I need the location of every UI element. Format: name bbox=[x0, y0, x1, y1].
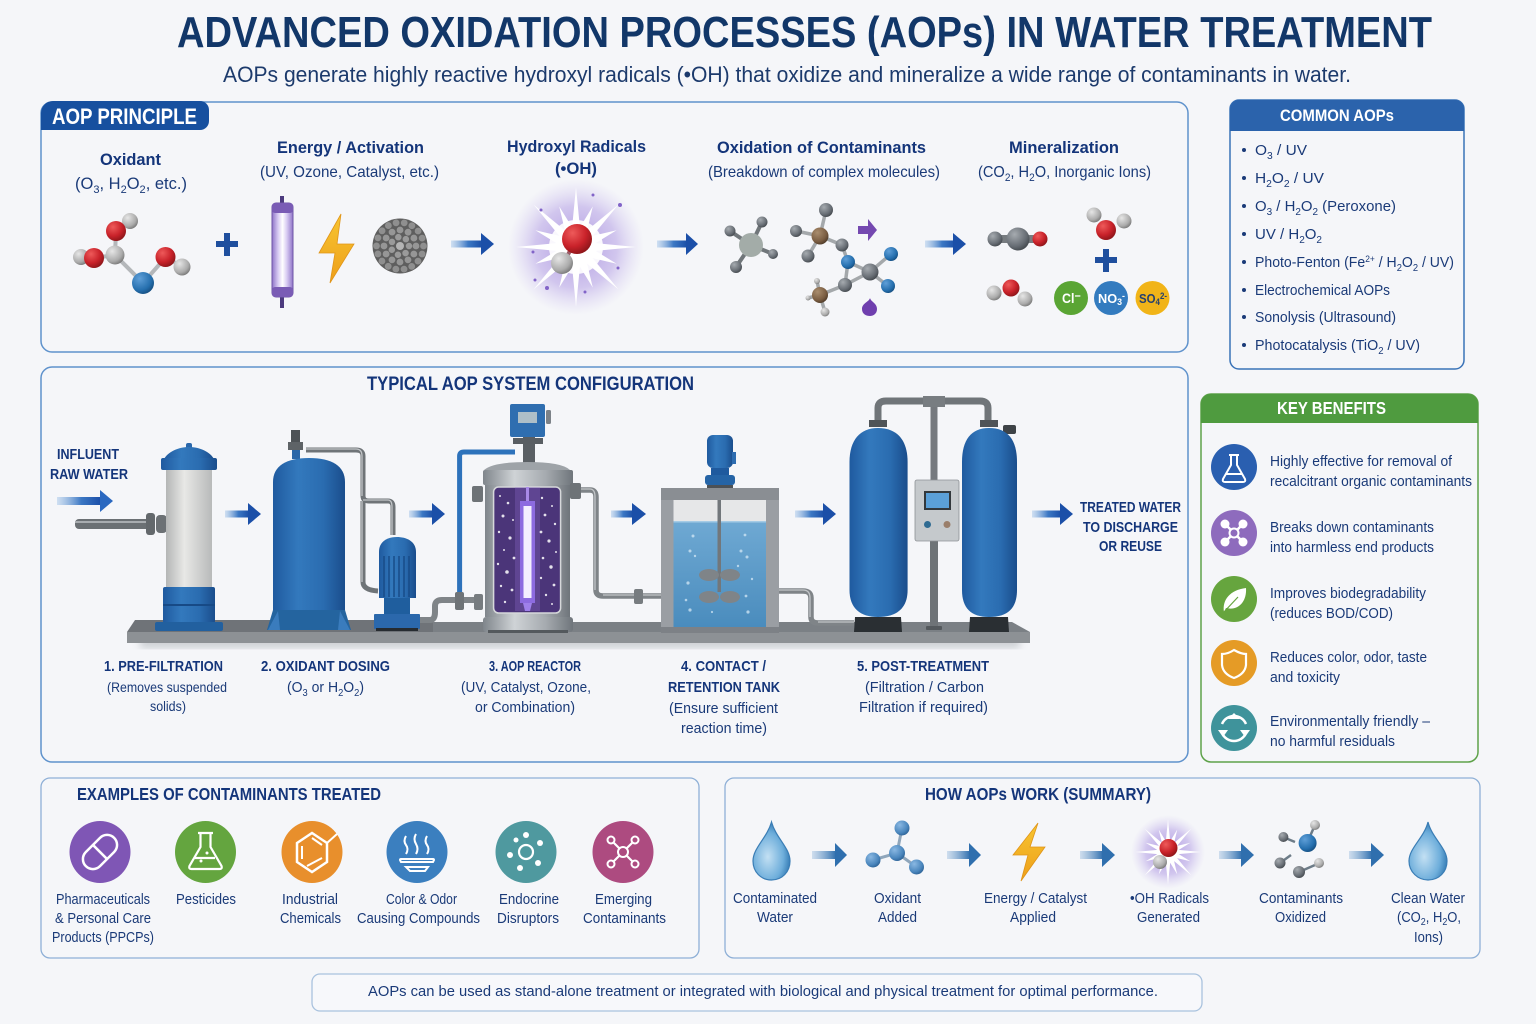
oxidant label: , etc.) bbox=[146, 175, 187, 193]
icon: purple fragment bbox=[862, 298, 877, 316]
step: clean water: (CO bbox=[1397, 910, 1424, 926]
list: common AOPs: (Peroxone) bbox=[1318, 198, 1396, 215]
step: OH radicals generated: •OH Radicals bbox=[1130, 891, 1209, 907]
step 5 label bbox=[857, 658, 989, 716]
benefit: breaks down contaminants bbox=[1211, 510, 1434, 556]
oxidation label bbox=[708, 138, 940, 181]
step: oxidant added: Oxidant bbox=[874, 891, 921, 907]
list: common AOPs: O bbox=[1255, 142, 1267, 159]
step: OH radicals generated: Generated bbox=[1137, 910, 1200, 926]
equipment: contact retention tank bbox=[661, 435, 854, 633]
list: common AOPs: 2 bbox=[1299, 235, 1305, 246]
treated water label: TO DISCHARGE bbox=[1083, 519, 1178, 536]
step: energy catalyst applied: Applied bbox=[1010, 910, 1056, 926]
arrow bbox=[812, 843, 847, 867]
heading: examples of contaminants: EXAMPLES OF CONTAMINANTS TREATED bbox=[77, 784, 381, 804]
step 4 label bbox=[668, 658, 780, 737]
arrow bbox=[611, 503, 646, 525]
step 3 label: 3. AOP REACTOR bbox=[489, 658, 581, 675]
list: common AOPs: / H bbox=[1272, 198, 1295, 215]
list: common AOPs: Photo-Fenton (Fe bbox=[1255, 254, 1373, 271]
benefit: breaks down contaminants: into harmless end products bbox=[1270, 540, 1434, 556]
oxidant label: Oxidant bbox=[100, 150, 161, 169]
step: contaminated water: Contaminated bbox=[733, 891, 817, 907]
icon: UV lamp bbox=[272, 196, 293, 308]
benefit: breaks down contaminants: Breaks down contaminants bbox=[1270, 520, 1434, 536]
step 3 label bbox=[461, 658, 591, 716]
oxidation label: Oxidation of Contaminants bbox=[717, 138, 926, 157]
step: clean water bbox=[1391, 822, 1465, 946]
step 2 label: or H bbox=[308, 679, 338, 696]
icon: contaminant molecule small bbox=[724, 216, 778, 273]
equipment: AOP reactor with UV lamp bbox=[420, 404, 661, 633]
oxidant label: (O bbox=[75, 175, 93, 193]
arrow bbox=[409, 503, 445, 525]
list: common AOPs: Sonolysis (Ultrasound) bbox=[1255, 309, 1396, 326]
step: oxidant added: Added bbox=[878, 910, 917, 926]
panel: AOP principle bbox=[41, 101, 1188, 352]
item: emerging contaminants: Contaminants bbox=[583, 911, 666, 927]
step 2 label bbox=[261, 658, 390, 699]
header: common AOPs: COMMON AOPs bbox=[1280, 106, 1394, 125]
step 4 label: RETENTION TANK bbox=[668, 679, 780, 696]
step: clean water: 2 bbox=[1421, 917, 1426, 928]
icon: sulfate ion: SO bbox=[1139, 291, 1158, 306]
icon: sulfate ion: 4 bbox=[1156, 297, 1160, 307]
step 4 label: reaction time) bbox=[681, 720, 767, 737]
hydroxyl label: (•OH) bbox=[555, 159, 597, 178]
step 1 label: 1. PRE-FILTRATION bbox=[104, 658, 223, 675]
icon: sulfate ion: 2- bbox=[1160, 291, 1167, 301]
item: pesticides bbox=[175, 821, 236, 908]
step 1 label bbox=[104, 658, 227, 714]
oxidation label: (Breakdown of complex molecules) bbox=[708, 164, 940, 181]
step: energy catalyst applied: Energy / Catalyst bbox=[984, 891, 1087, 907]
influent label: RAW WATER bbox=[50, 466, 128, 483]
mineralization label bbox=[978, 138, 1151, 184]
equipment platform bbox=[127, 620, 1030, 648]
step 2 label: ) bbox=[359, 679, 364, 696]
icon: nitrate ion: NO bbox=[1098, 291, 1118, 306]
benefit: highly effective: recalcitrant organic contaminants bbox=[1270, 474, 1472, 490]
benefit: reduces color odor taste: and toxicity bbox=[1270, 670, 1341, 686]
footer callout: AOPs can be used as stand-alone treatment or integrated with biological and physical treatment for optimal performance. bbox=[368, 983, 1158, 1000]
arrow bbox=[925, 233, 966, 255]
step: contaminants oxidized: Contaminants bbox=[1259, 891, 1343, 907]
list: common AOPs: 2 bbox=[1295, 207, 1301, 218]
list: common AOPs: / UV bbox=[1273, 142, 1307, 159]
step 2 label: O bbox=[343, 679, 354, 696]
header: key benefits: KEY BENEFITS bbox=[1277, 398, 1386, 418]
list: common AOPs: / UV) bbox=[1384, 337, 1420, 354]
list: common AOPs: O bbox=[1255, 198, 1267, 215]
header: common AOPs bbox=[1230, 100, 1464, 131]
benefit: biodegradability: (reduces BOD/COD) bbox=[1270, 606, 1393, 622]
step: contaminated water bbox=[733, 822, 817, 926]
list: common AOPs: 2 bbox=[1378, 346, 1384, 357]
energy label bbox=[260, 138, 439, 181]
arrow bbox=[451, 233, 494, 255]
item: pharmaceuticals: & Personal Care bbox=[55, 911, 151, 927]
heading: how AOPs work: HOW AOPs WORK (SUMMARY) bbox=[925, 784, 1151, 804]
icon: nitrate ion bbox=[1094, 281, 1128, 315]
energy label: Energy / Activation bbox=[277, 138, 424, 157]
list: common AOPs: / UV) bbox=[1418, 254, 1454, 271]
equipment: pre-filtration column bbox=[75, 443, 223, 631]
list: common AOPs: 3 bbox=[1267, 151, 1273, 162]
step: clean water: Clean Water bbox=[1391, 891, 1465, 907]
mineralization label: 2 bbox=[1005, 172, 1010, 184]
icon: water molecule bottom bbox=[986, 280, 1032, 306]
icon: oxidant molecule bbox=[73, 213, 190, 294]
list: common AOPs: 3 bbox=[1267, 207, 1273, 218]
step 1 label: solids) bbox=[150, 698, 186, 714]
list: common AOPs: 2 bbox=[1266, 179, 1272, 190]
step 4 label: (Ensure sufficient bbox=[669, 700, 779, 717]
treated water label bbox=[1080, 499, 1181, 555]
benefit: reduces color odor taste bbox=[1211, 640, 1427, 686]
step: clean water: 2 bbox=[1442, 917, 1448, 928]
list: common AOPs: O bbox=[1301, 198, 1313, 215]
item: endocrine disruptors: Disruptors bbox=[497, 911, 559, 927]
equipment: oxidant dosing tank and pump bbox=[267, 430, 420, 631]
step 2 label: 2 bbox=[354, 688, 360, 699]
list: common AOPs: UV / H bbox=[1255, 226, 1299, 243]
hydroxyl label: Hydroxyl Radicals bbox=[507, 137, 646, 156]
list: common AOPs: 2 bbox=[1284, 179, 1290, 190]
icon: purple arrow bbox=[858, 219, 877, 241]
item: emerging contaminants: Emerging bbox=[595, 892, 652, 908]
mineralization label: 2 bbox=[1029, 172, 1035, 184]
mineralization label: O, Inorganic Ions) bbox=[1035, 164, 1151, 181]
step: energy catalyst applied bbox=[984, 823, 1087, 926]
item: endocrine disruptors bbox=[496, 821, 559, 927]
item: industrial chemicals bbox=[280, 821, 342, 927]
icon: hydroxyl radical burst bbox=[508, 179, 644, 315]
item: emerging contaminants bbox=[583, 821, 666, 927]
panel: how AOPs work summary bbox=[725, 778, 1480, 958]
list: common AOPs: 2+ bbox=[1365, 254, 1375, 264]
list: common AOPs: 2 bbox=[1413, 263, 1418, 274]
benefit: environmentally friendly: no harmful residuals bbox=[1270, 734, 1395, 750]
step: contaminated water: Water bbox=[757, 910, 793, 926]
arrow bbox=[795, 503, 836, 525]
treated water label: OR REUSE bbox=[1099, 538, 1162, 555]
icon: plus bbox=[1095, 249, 1117, 272]
arrow bbox=[1032, 503, 1073, 525]
equipment: post-treatment filtration vessels bbox=[850, 396, 1017, 632]
panel: typical AOP system configuration bbox=[41, 367, 1188, 762]
item: color and odor compounds bbox=[357, 821, 480, 927]
item: color and odor compounds: Color & Odor bbox=[386, 892, 457, 908]
hydroxyl label bbox=[507, 137, 646, 178]
heading: system configuration: TYPICAL AOP SYSTEM CONFIGURATION bbox=[367, 374, 694, 395]
panel: key benefits bbox=[1201, 394, 1478, 762]
mineralization label: , H bbox=[1010, 164, 1029, 181]
arrow bbox=[1080, 843, 1115, 867]
benefit: biodegradability: Improves biodegradability bbox=[1270, 586, 1427, 602]
benefit: highly effective: Highly effective for removal of bbox=[1270, 454, 1453, 470]
oxidant label: 2 bbox=[121, 184, 127, 196]
benefit: highly effective bbox=[1211, 444, 1472, 490]
icon: water molecule top bbox=[1086, 208, 1132, 240]
arrow bbox=[657, 233, 698, 255]
benefit: biodegradability bbox=[1211, 576, 1427, 622]
item: pesticides: Pesticides bbox=[176, 892, 236, 908]
icon: nitrate ion: 3 bbox=[1117, 297, 1122, 307]
step 5 label: (Filtration / Carbon bbox=[865, 679, 984, 696]
step 2 label: 2 bbox=[338, 688, 344, 699]
icon: nitrate ion: - bbox=[1122, 291, 1125, 301]
list: common AOPs: O bbox=[1272, 170, 1284, 187]
icon: sulfate ion bbox=[1136, 281, 1170, 315]
item: industrial chemicals: Chemicals bbox=[280, 911, 341, 927]
icon: carbon dioxide bbox=[988, 228, 1048, 250]
arrow bbox=[225, 503, 261, 525]
item: industrial chemicals: Industrial bbox=[282, 892, 338, 908]
energy label: (UV, Ozone, Catalyst, etc.) bbox=[260, 164, 439, 181]
list: common AOPs: 2 bbox=[1397, 263, 1402, 274]
benefit: environmentally friendly bbox=[1211, 705, 1431, 751]
step 2 label: 2. OXIDANT DOSING bbox=[261, 658, 390, 675]
icon: chloride ion bbox=[1054, 281, 1088, 315]
mineralization label: Mineralization bbox=[1009, 138, 1119, 157]
treated water label: TREATED WATER bbox=[1080, 499, 1181, 516]
item: pharmaceuticals: Products (PPCPs) bbox=[52, 930, 154, 946]
list: common AOPs: / H bbox=[1375, 254, 1397, 271]
step: contaminants oxidized bbox=[1259, 820, 1343, 926]
icon: catalyst particle bbox=[372, 218, 428, 274]
step: contaminants oxidized: Oxidized bbox=[1275, 910, 1326, 926]
mineralization label: (CO bbox=[978, 164, 1007, 181]
step: clean water: , H bbox=[1426, 910, 1442, 926]
benefit: environmentally friendly: Environmentally friendly – bbox=[1270, 714, 1431, 730]
arrow: influent bbox=[57, 490, 113, 512]
step: OH radicals generated bbox=[1130, 815, 1209, 926]
list: common AOPs: Photocatalysis (TiO bbox=[1255, 337, 1384, 354]
header: key benefits bbox=[1201, 394, 1478, 423]
step 3 label: (UV, Catalyst, Ozone, bbox=[461, 679, 591, 696]
oxidant label: , H bbox=[99, 175, 121, 193]
list: common AOPs: H bbox=[1255, 170, 1266, 187]
influent label: INFLUENT bbox=[57, 446, 119, 463]
panel: examples of contaminants treated bbox=[41, 778, 699, 958]
influent label bbox=[50, 446, 128, 483]
arrow bbox=[1349, 843, 1384, 867]
list: common AOPs: 2 bbox=[1316, 235, 1322, 246]
footer callout bbox=[312, 974, 1202, 1011]
subtitle: AOPs generate highly reactive hydroxyl radicals (•OH) that oxidize and mineralize a wide range of contaminants in water. bbox=[223, 62, 1351, 87]
step 1 label: (Removes suspended bbox=[107, 679, 227, 695]
oxidant label bbox=[75, 150, 187, 196]
step 5 label: Filtration if required) bbox=[859, 699, 988, 716]
icon: contaminant molecule large bbox=[790, 203, 898, 316]
item: pharmaceuticals bbox=[52, 821, 154, 946]
arrow bbox=[1219, 843, 1254, 867]
step: oxidant added bbox=[866, 820, 924, 926]
panel tab: AOP principle: AOP PRINCIPLE bbox=[52, 104, 197, 129]
panel: common AOPs bbox=[1230, 100, 1464, 369]
step 5 label: 5. POST-TREATMENT bbox=[857, 658, 989, 675]
item: color and odor compounds: Causing Compounds bbox=[357, 911, 480, 927]
item: pharmaceuticals: Pharmaceuticals bbox=[56, 892, 150, 908]
arrow bbox=[947, 843, 981, 867]
step: clean water: O, bbox=[1447, 910, 1461, 926]
icon: plus bbox=[216, 233, 238, 256]
item: endocrine disruptors: Endocrine bbox=[499, 892, 559, 908]
step 2 label: (O bbox=[287, 679, 304, 696]
icon: lightning bolt bbox=[319, 214, 354, 283]
step 2 label: 3 bbox=[303, 688, 308, 699]
oxidant label: 3 bbox=[93, 184, 99, 196]
oxidant label: 2 bbox=[140, 184, 146, 196]
step 4 label: 4. CONTACT / bbox=[681, 658, 767, 675]
list: common AOPs bbox=[1242, 142, 1454, 357]
step 3 label: or Combination) bbox=[475, 699, 575, 716]
icon: chloride ion: Cl⁻ bbox=[1062, 290, 1081, 306]
step: clean water: Ions) bbox=[1414, 930, 1443, 946]
list: common AOPs: / UV bbox=[1290, 170, 1324, 187]
oxidant label: O bbox=[127, 175, 140, 193]
list: common AOPs: 2 bbox=[1313, 207, 1318, 218]
list: common AOPs: O bbox=[1402, 254, 1413, 271]
list: common AOPs: O bbox=[1305, 226, 1316, 243]
benefit: reduces color odor taste: Reduces color, odor, taste bbox=[1270, 650, 1427, 666]
list: common AOPs: Electrochemical AOPs bbox=[1255, 282, 1390, 299]
